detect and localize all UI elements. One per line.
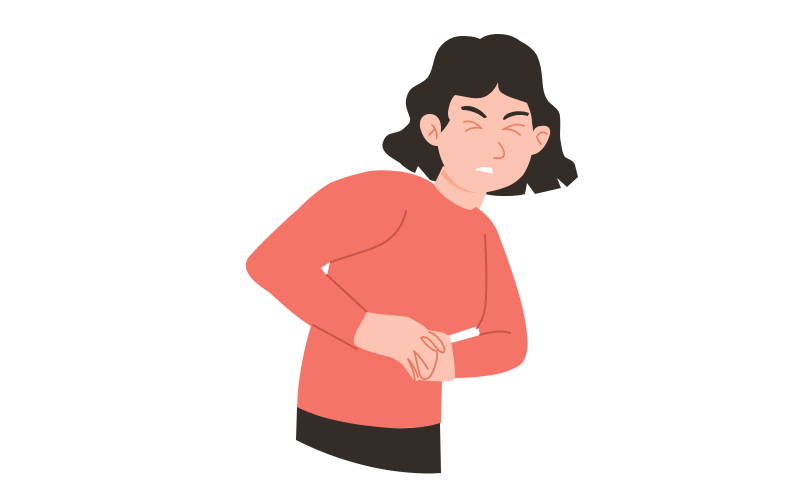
left eyebrow — [461, 106, 487, 118]
skirt — [296, 407, 441, 473]
right eyebrow — [503, 111, 529, 120]
face — [437, 82, 534, 193]
left ear — [420, 114, 441, 146]
sweater seams — [313, 211, 510, 349]
left closed eye — [464, 121, 481, 131]
sweater — [246, 170, 528, 428]
hands — [354, 312, 455, 381]
mouth — [475, 167, 493, 174]
hair — [382, 34, 578, 196]
right ear — [530, 126, 550, 155]
right closed eye — [504, 125, 524, 135]
nose — [494, 143, 504, 158]
neck — [434, 166, 492, 210]
